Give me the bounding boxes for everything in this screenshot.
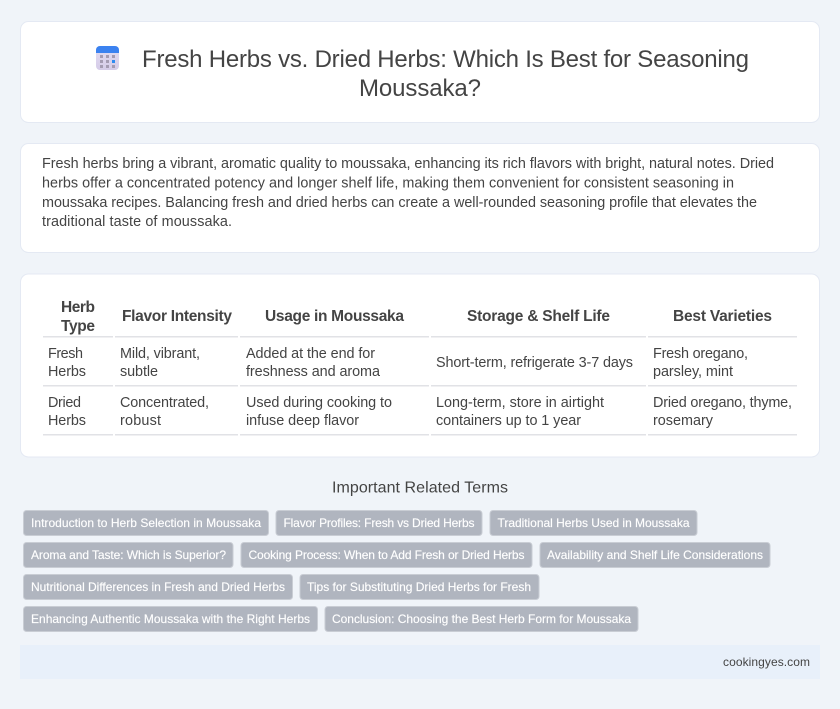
title: Fresh Herbs vs. Dried Herbs: Which Is Best for Seasoning — [142, 46, 749, 73]
text block: introduction paragraph: Fresh herbs bring a vibrant, aromatic quality to moussaka, enhancing its rich flavors with bright, natural notes. Dried — [42, 156, 774, 172]
table row: dried herbs: containers up to 1 year — [436, 413, 581, 429]
footer — [20, 645, 820, 679]
tag — [24, 574, 292, 600]
tag: Traditional Herbs Used in Moussaka — [498, 516, 690, 530]
tag — [24, 606, 318, 632]
table row: dried herbs: Long-term, store in airtight — [436, 395, 604, 411]
tag — [276, 510, 482, 536]
table row: fresh herbs — [48, 346, 748, 380]
table row: dried herbs: infuse deep flavor — [246, 413, 359, 429]
table header row: Flavor Intensity — [122, 308, 232, 325]
table row: dried herbs: Dried — [48, 395, 81, 411]
tag — [24, 542, 233, 568]
icon: calendar — [96, 46, 119, 70]
tag: Introduction to Herb Selection in Moussaka — [31, 516, 261, 530]
text block: introduction paragraph: moussaka recipes. Balancing fresh and dried herbs can create a well-rounded seasoning profile that elevates the — [42, 195, 757, 211]
tag: Cooking Process: When to Add Fresh or Dried Herbs — [248, 548, 524, 562]
table header row: Storage & Shelf Life — [467, 308, 610, 325]
table row: dried herbs: Used during cooking to — [246, 395, 392, 411]
panel: introduction — [20, 144, 820, 252]
text block: introduction paragraph — [42, 156, 774, 230]
table row: fresh herbs: Short-term, refrigerate 3-7 days — [436, 355, 633, 371]
tag — [540, 542, 770, 568]
table row: fresh herbs: Mild, vibrant, — [120, 346, 200, 362]
panel: comparison table — [20, 274, 820, 457]
table row: dried herbs: Concentrated, — [120, 395, 209, 411]
title: Moussaka? — [359, 75, 481, 102]
table row: fresh herbs: Fresh oregano, — [653, 346, 748, 362]
heading: important related terms: Important Related Terms — [332, 480, 508, 496]
title — [142, 46, 749, 102]
table row: dried herbs: Dried oregano, thyme, — [653, 395, 792, 411]
tag: Tips for Substituting Dried Herbs for Fresh — [307, 580, 531, 594]
table header row: Herb — [61, 299, 95, 316]
table header row: Best Varieties — [673, 308, 772, 325]
tag — [24, 510, 268, 536]
table row: fresh herbs: freshness and aroma — [246, 364, 380, 380]
text block: introduction paragraph: herbs offer a concentrated potency and longer shelf life, making them convenient for consistent seasoning in — [42, 176, 734, 192]
text block: introduction paragraph: traditional taste of moussaka. — [42, 214, 232, 230]
panel: title header — [20, 22, 820, 122]
table row: dried herbs: Herbs — [48, 413, 86, 429]
tag — [300, 574, 539, 600]
table header row: Usage in Moussaka — [265, 308, 404, 325]
table row: fresh herbs: parsley, mint — [653, 364, 733, 380]
footer: cookingyes.com — [723, 655, 810, 669]
table row: dried herbs: robust — [120, 413, 161, 429]
tag — [325, 606, 638, 632]
table header row — [61, 299, 772, 335]
table header row: Type — [61, 318, 95, 335]
tag: Nutritional Differences in Fresh and Dried Herbs — [31, 580, 285, 594]
table row: fresh herbs: Herbs — [48, 364, 86, 380]
table row: dried herbs: rosemary — [653, 413, 714, 429]
tag: Enhancing Authentic Moussaka with the Right Herbs — [31, 612, 310, 626]
table row: fresh herbs: Added at the end for — [246, 346, 375, 362]
table row: fresh herbs: Fresh — [48, 346, 83, 362]
table row: fresh herbs: subtle — [120, 364, 158, 380]
panel: related term tags — [24, 510, 770, 632]
tag: Aroma and Taste: Which is Superior? — [31, 548, 226, 562]
table row: dried herbs — [48, 395, 792, 429]
tag — [241, 542, 532, 568]
tag: Flavor Profiles: Fresh vs Dried Herbs — [284, 516, 474, 530]
tag — [490, 510, 697, 536]
tag: Availability and Shelf Life Considerations — [547, 548, 763, 562]
tag: Conclusion: Choosing the Best Herb Form for Moussaka — [332, 612, 631, 626]
